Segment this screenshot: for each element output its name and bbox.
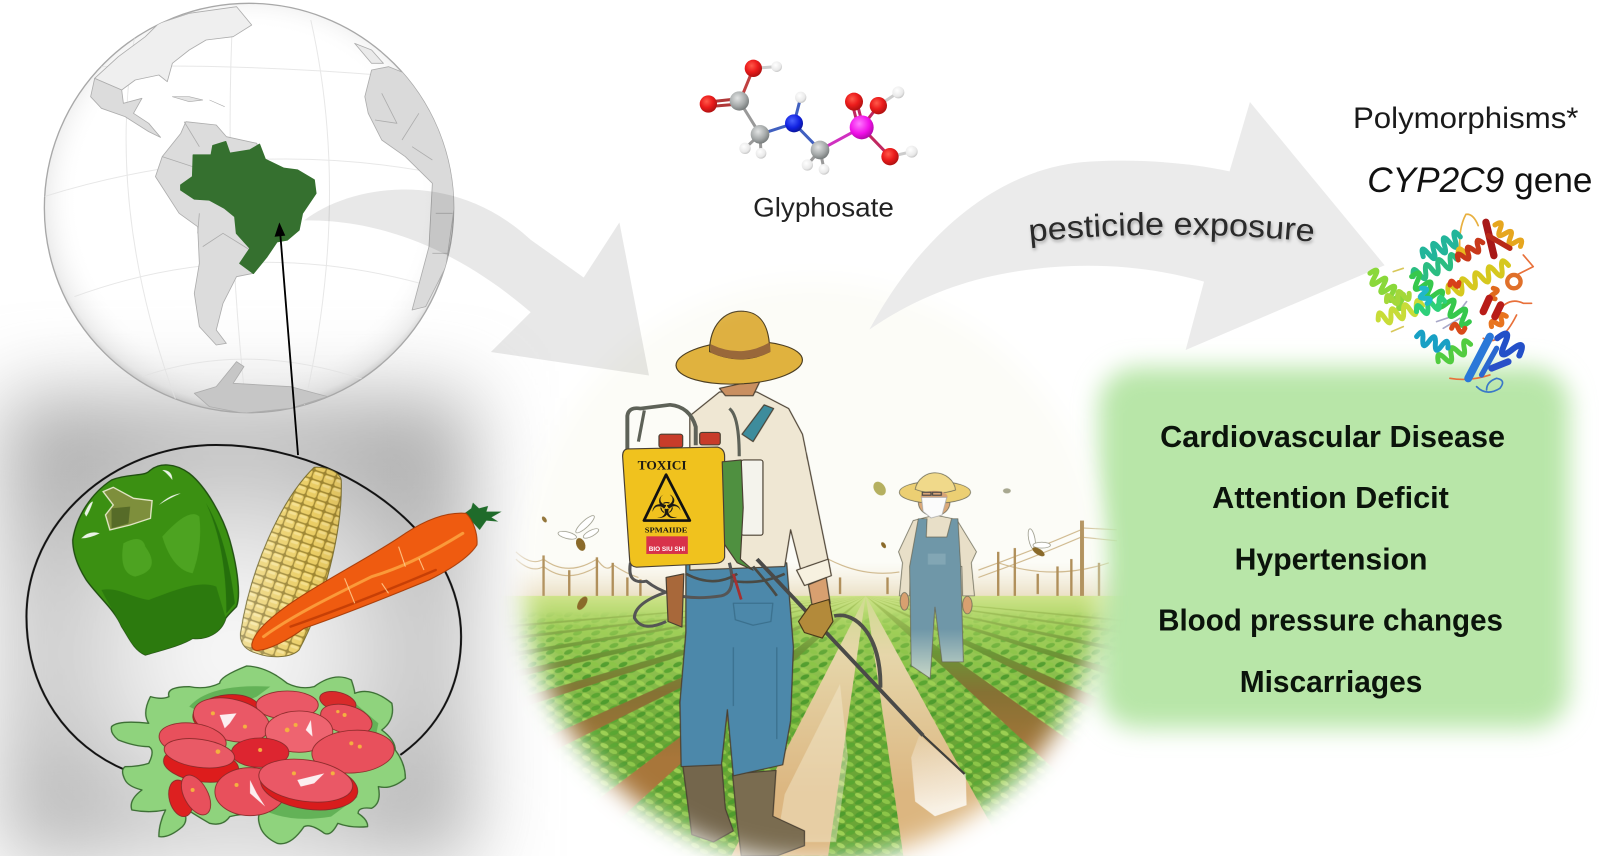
corn cob — [241, 467, 341, 657]
carrot — [252, 503, 502, 651]
label: Glyphosate: Glyphosate — [753, 192, 894, 222]
straw hat — [675, 311, 804, 387]
effect: Attention Deficit: Attention Deficit — [1212, 482, 1449, 515]
alpha helices — [1365, 221, 1525, 367]
shirt and arm — [690, 392, 830, 585]
Brazil — [181, 142, 316, 273]
spray wand, hose and glove — [757, 559, 965, 774]
neck — [718, 382, 760, 396]
grey arrow from Brazil to farmer — [304, 189, 649, 375]
boots — [683, 762, 733, 842]
trousers — [680, 563, 793, 776]
spray plume — [911, 735, 967, 816]
sprayer tank labels: SPMAIIDE — [645, 526, 687, 535]
thin coil loops — [1392, 214, 1533, 392]
sprayer tank labels — [638, 458, 687, 553]
small insects in the air — [541, 480, 1050, 611]
arrow label: pesticide exposure: pesticide exposure — [1030, 212, 1316, 252]
health effects list — [1158, 421, 1505, 699]
sprayer tank labels: TOXICI — [638, 458, 687, 472]
sprayer tank labels: BIO SIU SHI — [649, 546, 685, 553]
plate outline — [26, 445, 461, 771]
effect: Miscarriages: Miscarriages — [1240, 666, 1422, 699]
label: Polymorphisms: Polymorphisms* — [1353, 102, 1579, 135]
strap — [742, 405, 774, 442]
man with backpack sprayer — [680, 379, 831, 856]
farmer scene in a soft circle — [506, 310, 1118, 856]
effect: Hypertension: Hypertension — [1235, 543, 1427, 576]
arrow from vegetables to Brazil — [275, 222, 298, 455]
tomato slices — [157, 688, 396, 820]
crop field — [506, 483, 1120, 856]
beta strands — [1468, 222, 1521, 378]
effect: Cardiovascular Disease: Cardiovascular Disease — [1160, 421, 1505, 454]
glyphosate molecule — [700, 60, 918, 175]
molecule bonds — [708, 67, 912, 169]
label: CYP2C9 gene: CYP2C9 — [1367, 161, 1504, 200]
soft grey shadow panel behind vegetables — [5, 398, 469, 856]
graticule and continents — [44, 7, 454, 413]
tomato highlights and seeds — [220, 713, 324, 807]
backpack sprayer tank — [623, 405, 785, 627]
second farmer in overalls and mask — [899, 473, 976, 678]
food plate illustration — [26, 445, 502, 844]
label: CYP2C9 gene: gene — [1514, 161, 1592, 200]
effect: Blood pressure changes: Blood pressure changes — [1158, 605, 1503, 638]
lettuce and tomato salad — [111, 666, 405, 844]
white pesticide residue on soil — [777, 684, 848, 842]
sprayer tank labels: ☣ — [651, 488, 682, 526]
utility poles and wires — [516, 520, 1116, 596]
protein ribbon structure — [1365, 214, 1533, 392]
green health effects box background — [1099, 367, 1569, 728]
globe highlighting Brazil — [44, 3, 454, 413]
grey curved arrow: pesticide exposure — [869, 102, 1385, 350]
green bell pepper — [73, 465, 238, 655]
molecule atoms — [700, 60, 918, 175]
